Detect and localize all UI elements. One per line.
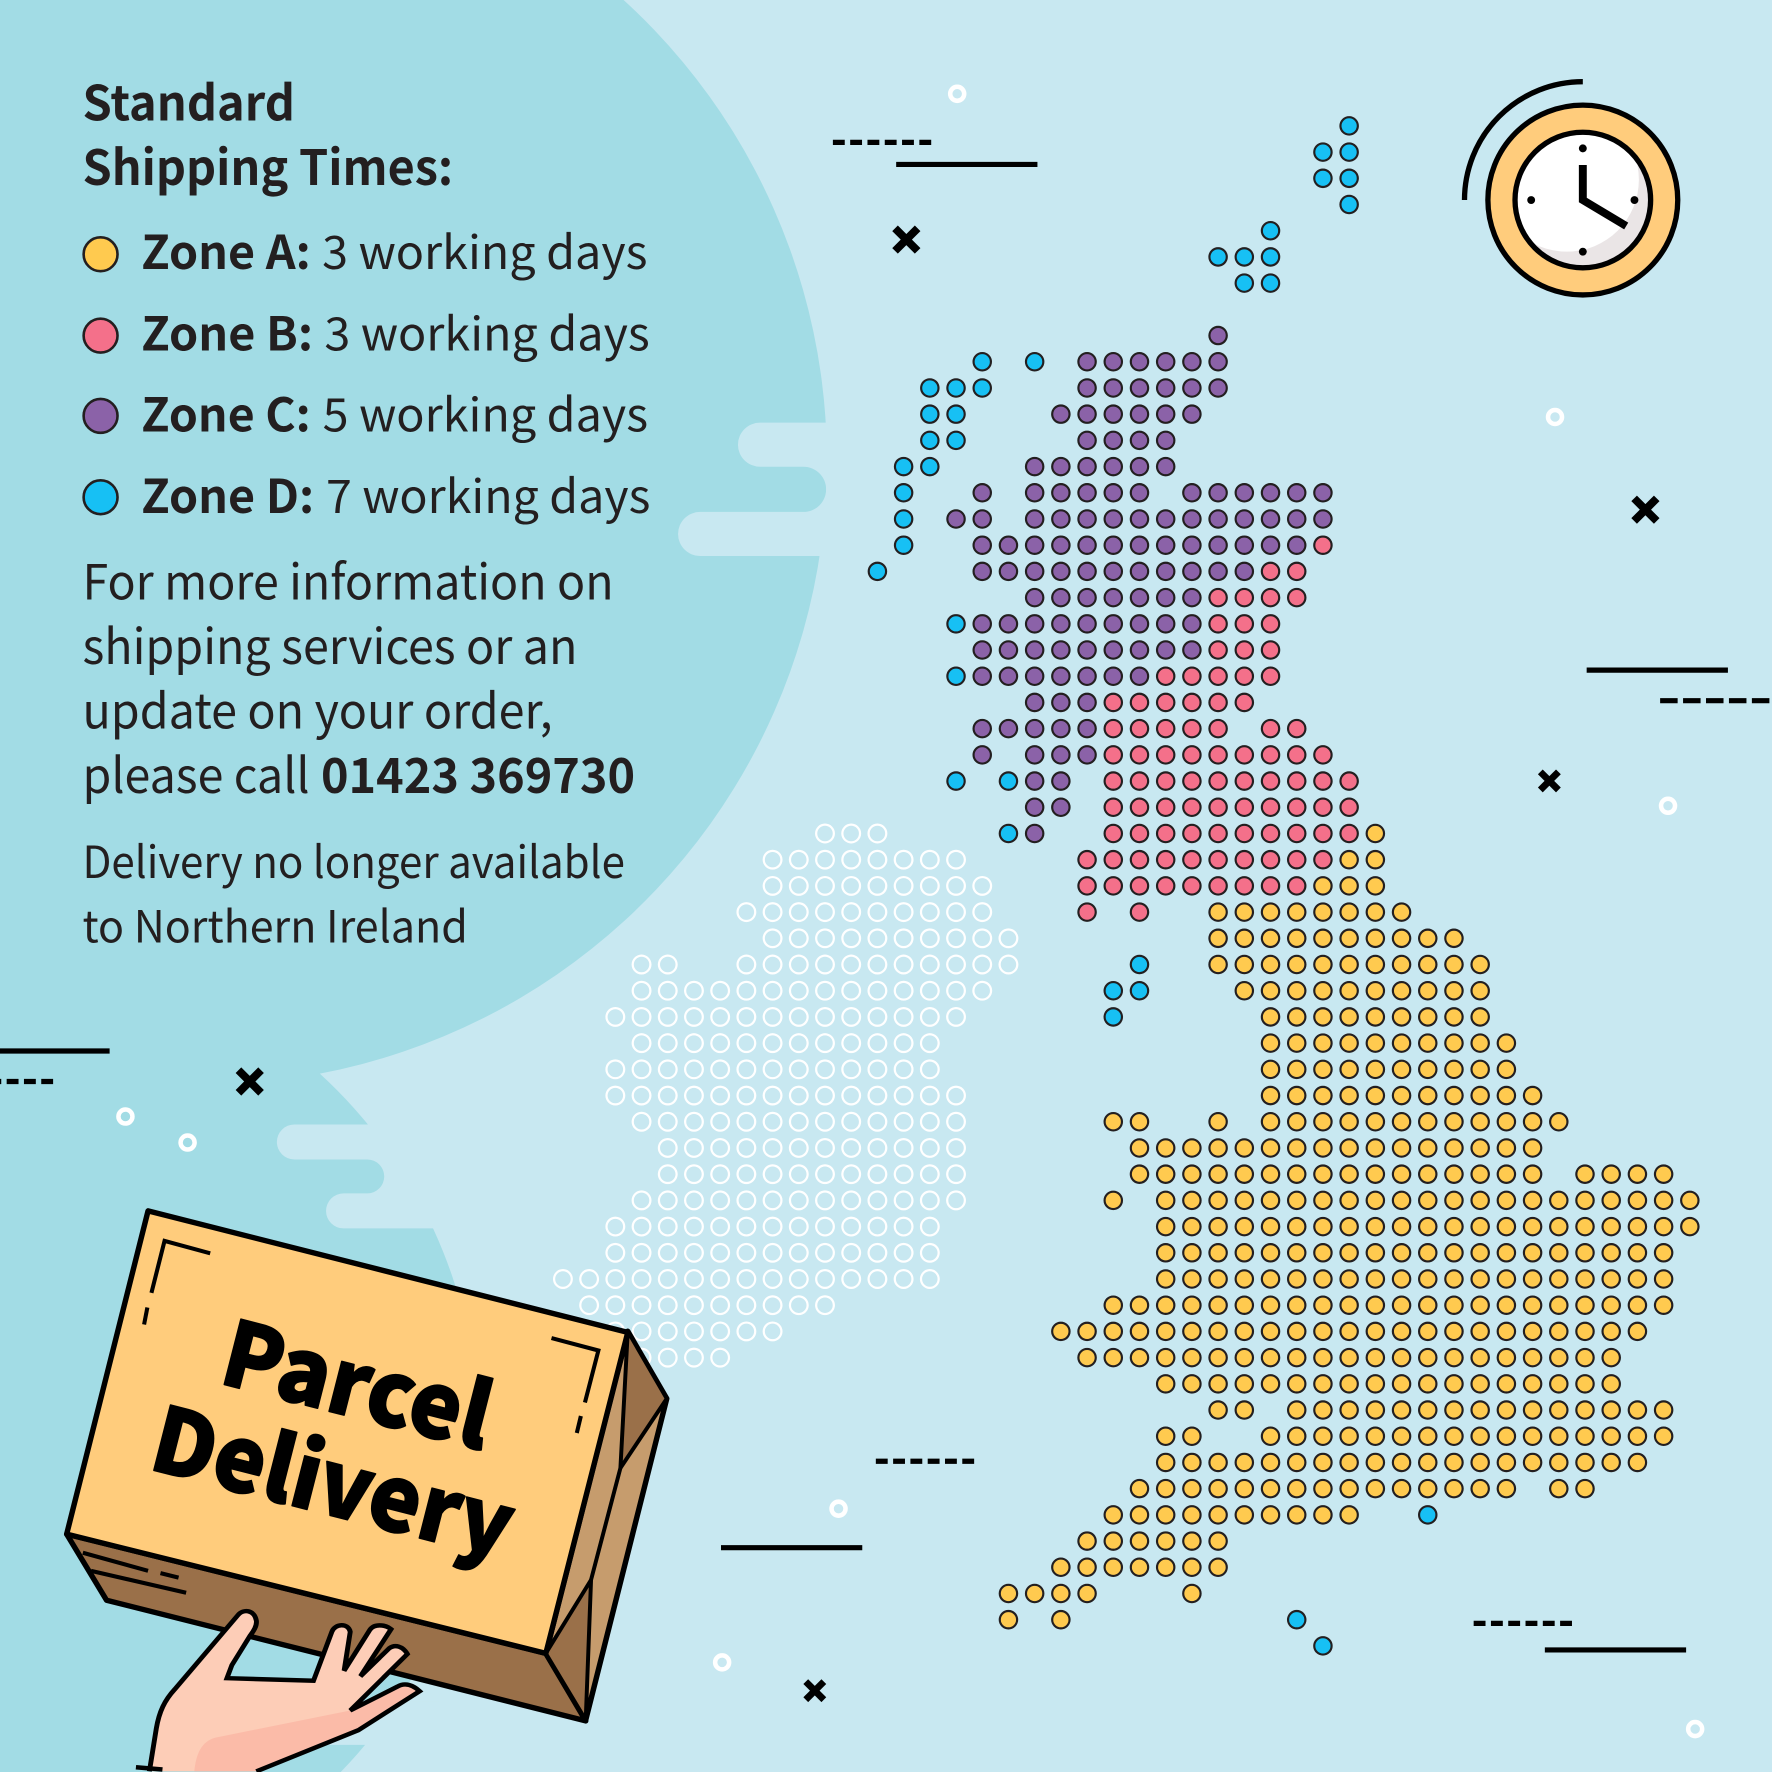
legend: Zone D: Zone D: (141, 460, 314, 527)
legend: Zone D (84, 460, 650, 527)
legend: Zone D: 7 working days (326, 460, 650, 527)
box label text: Parcel (210, 1282, 508, 1476)
hand holding box (136, 1611, 420, 1771)
heading: Shipping Times: (82, 129, 453, 199)
legend: Zone A: 3 working days (322, 216, 648, 283)
Northern Ireland note: to Northern Ireland (82, 892, 468, 956)
box label text (140, 1282, 529, 1586)
Northern Ireland note (82, 827, 625, 956)
legend: Zone B (84, 297, 650, 364)
decorative crosses (238, 228, 1657, 1700)
legend: Zone B: 3 working days (324, 297, 650, 364)
contact information text: shipping services or an (82, 608, 577, 678)
map: Ireland dots, not served (563, 833, 1009, 1358)
contact information text (82, 544, 635, 807)
background blobs (0, 0, 870, 1772)
map: Zone C dots (956, 336, 1323, 833)
icon: clock (1464, 82, 1678, 295)
legend: Zone A: Zone A: (141, 216, 311, 283)
legend: Zone C (84, 379, 648, 446)
box label text: Delivery (140, 1368, 529, 1586)
map: Zone A dots (1008, 833, 1690, 1620)
contact information text: update on your order, (82, 672, 553, 742)
heading (82, 64, 453, 199)
legend: Zone B: Zone B: (141, 297, 313, 364)
legend: Zone C: Zone C: (141, 379, 311, 446)
contact information text: For more information on (82, 544, 614, 614)
heading: Standard (82, 64, 295, 134)
parcel box (67, 1211, 667, 1721)
map: Zone B dots (1087, 545, 1349, 912)
legend: Zone C: 5 working days (323, 379, 648, 446)
box side label lines (83, 1553, 186, 1593)
legend: Zone A (84, 216, 648, 283)
legend (84, 216, 650, 527)
Northern Ireland note: Delivery no longer available (82, 827, 625, 891)
box corner marks (144, 1241, 598, 1433)
contact information text: please call (82, 737, 310, 807)
contact information text: 01423 369730 (321, 737, 635, 807)
map: Zone D dots (877, 126, 1428, 1646)
